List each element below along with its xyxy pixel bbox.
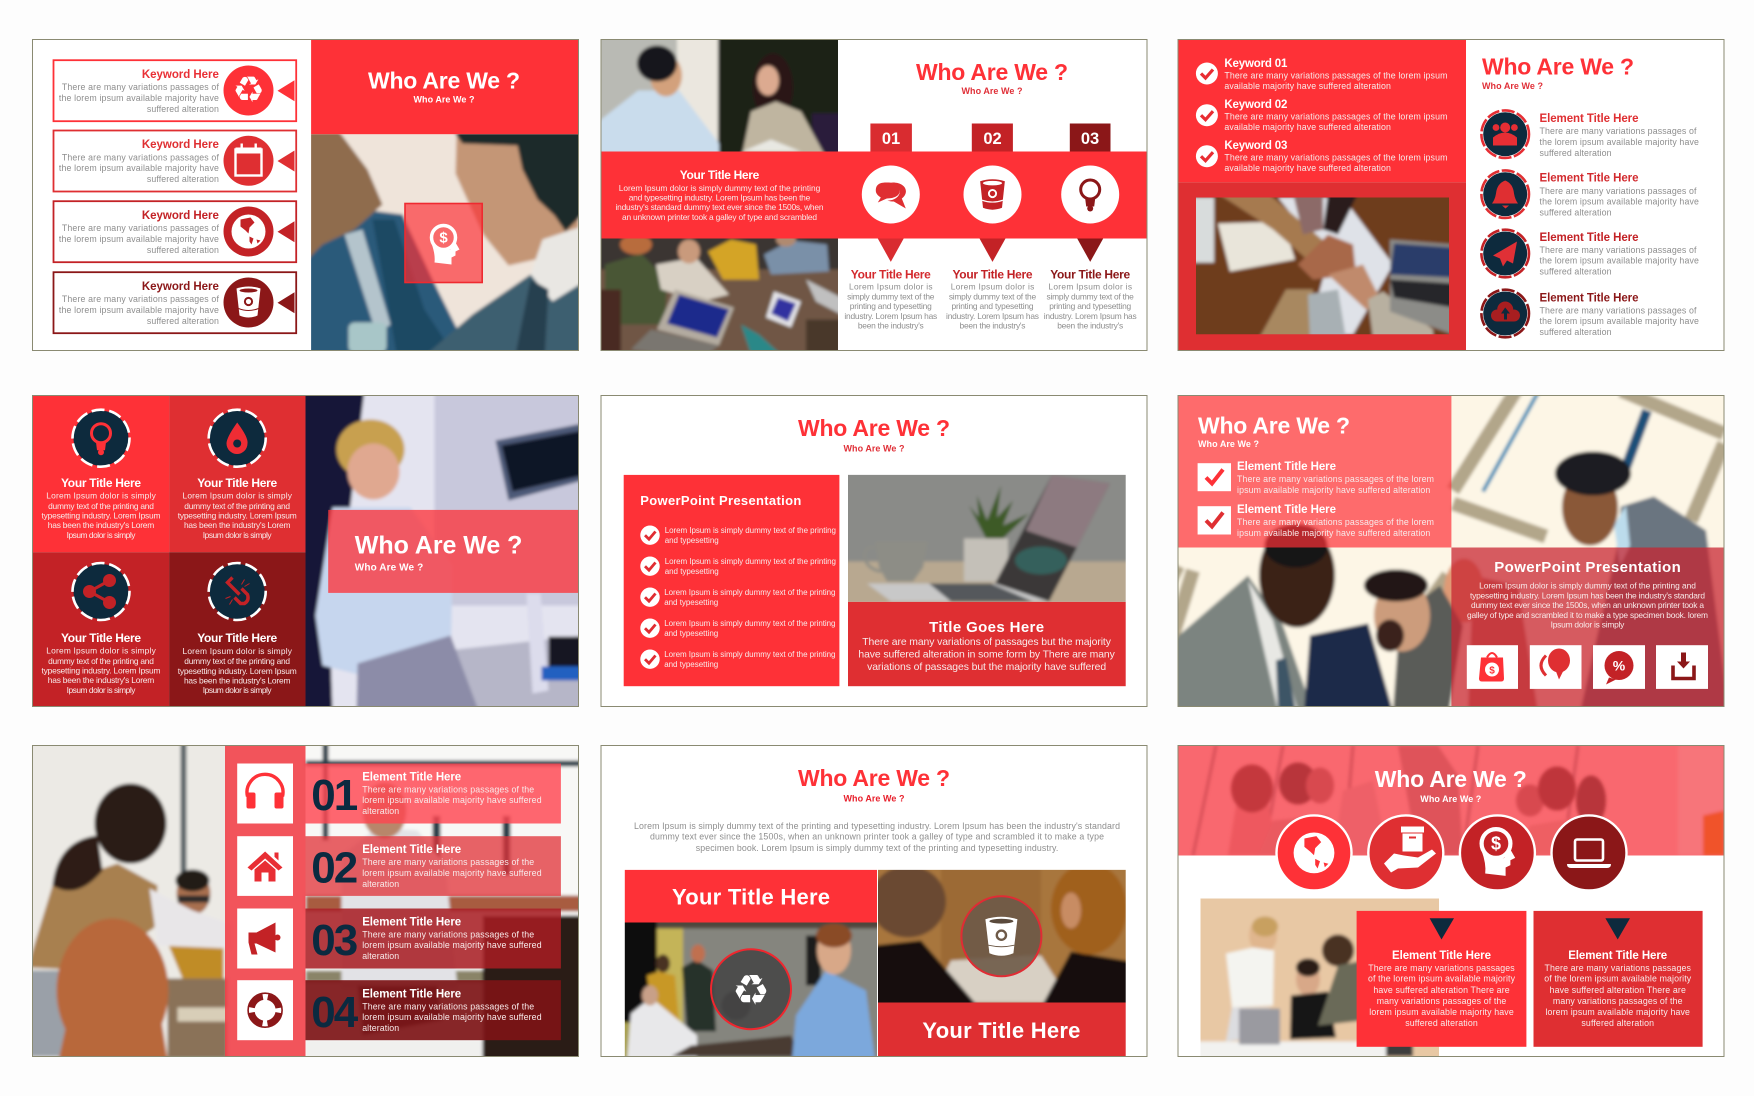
quadrant 4: Ipsum dolor is simply xyxy=(203,685,272,695)
panel: slide 9 four circles and two boxes xyxy=(1178,746,1724,1060)
keyword box 1 xyxy=(54,60,296,121)
element 2: Element Title Here xyxy=(1540,172,1638,184)
photo: team in studio xyxy=(621,918,881,1060)
checklist panel: and typesetting xyxy=(664,598,718,607)
element 03: There are many variations passages of the xyxy=(362,930,534,940)
checklist panel xyxy=(624,475,839,686)
keyword box 1: suffered alteration xyxy=(147,104,219,114)
panel: slide 7 numbered elements xyxy=(28,740,586,1066)
checklist panel: and typesetting xyxy=(664,660,718,669)
translucent panel: powerpoint presentation: PowerPoint Presentation xyxy=(1494,559,1681,576)
element 3 xyxy=(1481,230,1699,277)
step 03: industry. Lorem Ipsum has xyxy=(1044,311,1137,321)
icon: bucket in ring xyxy=(961,896,1041,976)
keyword box 3: the lorem ipsum available majority have xyxy=(59,234,219,244)
quadrant 4: Lorem Ipsum dolor is simply xyxy=(182,646,293,656)
photo: three colleagues at laptop xyxy=(1196,894,1443,1060)
quadrant 1: Your Title Here xyxy=(61,476,141,490)
quadrant 4: Your Title Here xyxy=(197,631,278,645)
keyword box 2: Keyword Here xyxy=(142,139,219,151)
icon: speech bubbles xyxy=(1530,645,1582,689)
step 01: Your Title Here xyxy=(851,268,931,282)
element 2 xyxy=(1481,170,1699,218)
element 4: suffered alteration xyxy=(1540,327,1612,337)
keyword box 3 xyxy=(54,201,296,262)
circle icon: hand holding box xyxy=(1368,815,1443,890)
checklist panel: Lorem Ipsum is simply dummy text of the printing xyxy=(664,650,836,659)
translucent heading band: Who Are We ? xyxy=(355,562,423,574)
quadrant 3 xyxy=(32,552,169,706)
quadrant 3: Your Title Here xyxy=(61,631,141,645)
red keyword panel: Keyword 03 xyxy=(1224,140,1287,152)
translucent panel: who are we: There are many variations passages of the lorem xyxy=(1237,474,1434,484)
icon: recycle in ring: ♻ xyxy=(732,966,770,1014)
element 3: the lorem ipsum available majority have xyxy=(1540,256,1699,266)
info box left: of the lorem ipsum available majority xyxy=(1368,974,1516,984)
panel: slide 1 keywords xyxy=(32,40,588,360)
info box right: lorem ipsum available majority have xyxy=(1545,1007,1690,1017)
photo band tinted red xyxy=(1178,746,1724,856)
quadrant 1: Lorem Ipsum dolor is simply xyxy=(46,490,157,500)
info box right: suffered alteration xyxy=(1581,1018,1654,1028)
element 04: 04 xyxy=(311,988,359,1037)
red keyword panel: Keyword 01 xyxy=(1224,58,1288,70)
step 02: industry. Lorem Ipsum has xyxy=(946,311,1039,321)
quadrant 2: has been the industry's Lorem xyxy=(184,520,290,530)
red keyword panel: There are many variations passages of the lorem ipsum xyxy=(1224,70,1447,80)
red keyword panel: available majority have suffered alteration xyxy=(1224,122,1391,132)
heading: Who Are We ? xyxy=(798,415,950,441)
quadrant 1 xyxy=(32,396,169,552)
element 1: There are many variations passages of xyxy=(1540,126,1697,136)
heading panel xyxy=(311,40,578,134)
quadrant 2 xyxy=(169,396,306,552)
photo: businessman reading xyxy=(311,134,578,350)
quadrant 1: dummy text of the printing and xyxy=(48,501,154,511)
photo: businesswoman xyxy=(302,390,584,710)
checklist panel: and typesetting xyxy=(665,567,719,576)
translucent panel: powerpoint presentation: dummy text ever since the 1500s, when an unknown printer took a xyxy=(1471,600,1704,610)
quadrant 3: Lorem Ipsum dolor is simply xyxy=(46,646,157,656)
icon: download tray xyxy=(1656,645,1708,689)
element 04: alteration xyxy=(362,1023,399,1033)
info box right: There are many variations passages xyxy=(1544,963,1691,973)
icon: head with dollar in translucent square: $ xyxy=(439,230,448,246)
caption panel xyxy=(848,602,1126,686)
circle icon: laptop xyxy=(1552,815,1626,890)
info box left: many variations passages of the xyxy=(1377,996,1506,1006)
checklist panel: and typesetting xyxy=(665,536,719,545)
photo: man and woman talking xyxy=(602,40,838,152)
translucent panel: who are we: Who Are We ? xyxy=(1198,412,1350,438)
panel: slide 2 three-step band xyxy=(596,34,1147,360)
heading: Who Are We ? xyxy=(844,794,904,804)
step 03 xyxy=(1044,124,1137,330)
red band: Your Title Here xyxy=(680,168,760,182)
heading xyxy=(798,415,950,454)
step 02: simply dummy text of the xyxy=(949,292,1036,302)
caption panel: variations of passages but the majority have suffered xyxy=(867,662,1106,673)
element 4: the lorem ipsum available majority have xyxy=(1540,316,1699,326)
quadrant 1: has been the industry's Lorem xyxy=(48,520,154,530)
circle icon: head with dollar xyxy=(1460,815,1535,890)
icon: head with dollar in translucent square xyxy=(405,204,482,282)
panel: slide 3 keywords and elements xyxy=(1178,40,1724,350)
step 02: been the industry's xyxy=(960,320,1025,330)
element 01: Element Title Here xyxy=(362,772,461,784)
icon: shopping bag: $ xyxy=(1489,666,1495,676)
caption panel: There are many variations of passages but the majority xyxy=(862,637,1112,648)
info box left: have suffered alteration There are xyxy=(1373,985,1510,995)
quadrant 4: dummy text of the printing and xyxy=(184,656,290,666)
step 03: printing and typesetting xyxy=(1049,301,1132,311)
step 03: simply dummy text of the xyxy=(1047,292,1134,302)
element 2: the lorem ipsum available majority have xyxy=(1540,196,1699,206)
element 01: alteration xyxy=(362,806,399,816)
translucent panel: powerpoint presentation: Ipsum dolor is simply xyxy=(1551,620,1625,630)
red band: industry's standard dummy text ever since the 1500s, when xyxy=(616,202,824,212)
heading: Who Are We ? xyxy=(1482,54,1634,80)
keyword box 2: suffered alteration xyxy=(147,174,219,184)
element 01: lorem ipsum available majority have suffered xyxy=(362,795,542,805)
intro text: dummy text ever since the 1500s, when an unknown printer took a galley of type and scrambled it to make a type xyxy=(650,832,1104,842)
quadrant 4: has been the industry's Lorem xyxy=(184,676,290,686)
intro text: Lorem Ipsum is simply dummy text of the printing and typesetting industry. Lorem Ipsum has been the industry's standard xyxy=(634,821,1120,831)
quadrant 3: has been the industry's Lorem xyxy=(48,675,154,685)
step 02: 02 xyxy=(983,130,1002,148)
info box left xyxy=(1357,911,1526,1047)
checklist panel: and typesetting xyxy=(664,629,718,638)
circle icon: globe xyxy=(1276,815,1352,890)
photo: two women at a table xyxy=(878,870,1126,1002)
step 01: Lorem Ipsum dolor is xyxy=(849,282,933,292)
element 03: alteration xyxy=(362,951,399,961)
element 04: lorem ipsum available majority have suffered xyxy=(362,1012,542,1022)
caption panel: Title Goes Here xyxy=(929,619,1044,636)
translucent panel: powerpoint presentation xyxy=(1451,548,1724,706)
quadrant 4: typesetting industry. Lorem Ipsum xyxy=(178,666,297,676)
heading xyxy=(798,765,950,804)
step 02 xyxy=(946,124,1039,330)
element 04: Element Title Here xyxy=(362,988,461,1000)
step 01: 01 xyxy=(882,130,900,148)
info box left: suffered alteration xyxy=(1405,1018,1478,1028)
panel: slide 4 four quadrants xyxy=(32,390,584,710)
quadrant 2: Ipsum dolor is simply xyxy=(203,530,272,540)
checklist panel: Lorem Ipsum is simply dummy text of the printing xyxy=(664,619,836,628)
element 2: suffered alteration xyxy=(1540,208,1612,218)
title bar left xyxy=(625,870,877,922)
icon: shopping bag xyxy=(1467,645,1518,689)
step 03: been the industry's xyxy=(1057,320,1123,330)
checklist panel: Lorem Ipsum is simply dummy text of the printing xyxy=(664,588,836,597)
quadrant 1: typesetting industry. Lorem Ipsum xyxy=(42,510,161,520)
icon: percent bubble: % xyxy=(1613,658,1626,674)
heading: Who Are We ? xyxy=(1420,794,1481,804)
keyword box 4: suffered alteration xyxy=(147,316,219,326)
keyword box 4: Keyword Here xyxy=(142,281,219,293)
quadrant 2: Lorem Ipsum dolor is simply xyxy=(182,490,293,500)
heading panel: Who Are We ? xyxy=(414,94,474,104)
quadrant 3: Ipsum dolor is simply xyxy=(67,685,136,695)
translucent panel: who are we: Element Title Here xyxy=(1237,461,1336,473)
photo: stacked hands on desk xyxy=(1192,194,1454,338)
keyword box 4: the lorem ipsum available majority have xyxy=(59,305,219,315)
element 4 xyxy=(1481,290,1699,337)
keyword box 2 xyxy=(54,130,296,192)
heading xyxy=(1482,54,1634,91)
translucent panel: who are we: Who Are We ? xyxy=(1198,439,1259,449)
step 01: industry. Lorem Ipsum has xyxy=(844,311,937,321)
step 03: Your Title Here xyxy=(1050,268,1131,282)
heading xyxy=(1375,766,1527,804)
step 02: Lorem Ipsum dolor is xyxy=(951,282,1034,292)
title bar right xyxy=(878,1002,1126,1056)
info box right: have suffered alteration There are xyxy=(1550,985,1686,995)
panel: slide 6 team photo with overlays xyxy=(1168,390,1729,712)
translucent panel: who are we xyxy=(1178,396,1451,548)
quadrant 4 xyxy=(169,552,306,706)
intro text xyxy=(634,821,1120,853)
step 03: Lorem Ipsum dolor is xyxy=(1048,282,1132,292)
red keyword panel xyxy=(1178,40,1466,350)
circle icon: head with dollar: $ xyxy=(1491,833,1501,853)
element 1: Element Title Here xyxy=(1540,113,1638,125)
info box right: of the lorem ipsum available majority xyxy=(1544,974,1692,984)
element 02: alteration xyxy=(362,879,399,889)
element 01: 01 xyxy=(311,771,358,820)
keyword box 4 xyxy=(54,272,296,333)
keyword box 3: suffered alteration xyxy=(147,245,219,255)
heading: Who Are We ? xyxy=(1482,81,1543,91)
info box left: There are many variations passages xyxy=(1368,963,1515,973)
step 01 xyxy=(844,124,937,330)
translucent panel: who are we: There are many variations passages of the lorem xyxy=(1237,517,1434,527)
keyword box 3: There are many variations passages of xyxy=(62,223,219,233)
quadrant 2: typesetting industry. Lorem Ipsum xyxy=(178,510,297,520)
step 02: printing and typesetting xyxy=(952,301,1034,311)
translucent panel: who are we: Element Title Here xyxy=(1237,504,1336,516)
step 02: Your Title Here xyxy=(952,268,1033,282)
element 03: 03 xyxy=(311,916,358,965)
heading panel: Who Are We ? xyxy=(368,68,520,94)
info box right: many variations passages of the xyxy=(1553,996,1683,1006)
info box right xyxy=(1534,911,1703,1047)
element 04 xyxy=(237,980,561,1040)
quadrant 3: typesetting industry. Lorem Ipsum xyxy=(42,666,161,676)
heading: Who Are We ? xyxy=(844,444,904,454)
translucent red column xyxy=(225,746,306,1056)
intro text: specimen book. Lorem Ipsum is simply dummy text of the printing and typesetting industry. xyxy=(696,843,1058,853)
step 01: simply dummy text of the xyxy=(847,292,935,302)
translucent panel: who are we: ipsum available majority have suffered alteration xyxy=(1237,528,1430,538)
heading: Who Are We ? xyxy=(962,86,1022,96)
red band: and typesetting industry. Lorem Ipsum has been the xyxy=(629,192,811,202)
checklist panel: Lorem Ipsum is simply dummy text of the printing xyxy=(665,526,836,535)
icon: recycle in ring xyxy=(711,949,791,1029)
photo: smiling business team xyxy=(1168,390,1729,712)
panel: slide 8 two titled photos xyxy=(601,746,1147,1060)
element 3: Element Title Here xyxy=(1540,232,1638,244)
quadrant 2: Your Title Here xyxy=(197,476,278,490)
keyword box 1: Keyword Here xyxy=(142,69,219,81)
element 1 xyxy=(1481,110,1699,158)
element 04: There are many variations passages of the xyxy=(362,1002,534,1012)
photo: team around a table xyxy=(602,238,838,350)
translucent heading band xyxy=(328,510,578,593)
element 03 xyxy=(237,908,561,968)
red band xyxy=(601,152,1147,238)
element 02 xyxy=(237,836,561,896)
keyword box 4: There are many variations passages of xyxy=(62,294,219,304)
red keyword panel: available majority have suffered alteration xyxy=(1224,163,1391,173)
quadrant 2: dummy text of the printing and xyxy=(184,501,290,511)
translucent panel: powerpoint presentation: galley of type and scrambled it to make a type specimen book. lorem xyxy=(1467,610,1708,620)
title bar right: Your Title Here xyxy=(922,1018,1080,1043)
step 03: 03 xyxy=(1081,130,1099,148)
quadrant 3: dummy text of the printing and xyxy=(48,656,154,666)
photo: meeting room xyxy=(28,740,586,1066)
translucent panel: who are we: ipsum available majority have suffered alteration xyxy=(1237,485,1430,495)
info box right: Element Title Here xyxy=(1568,950,1667,962)
element 02: Element Title Here xyxy=(362,844,461,856)
element 3: There are many variations passages of xyxy=(1540,245,1697,255)
element 2: There are many variations passages of xyxy=(1540,186,1697,196)
element 01: There are many variations passages of the xyxy=(362,784,534,794)
element 02: 02 xyxy=(311,844,358,892)
info box left: Element Title Here xyxy=(1392,950,1491,962)
red band: Lorem Ipsum dolor is simply dummy text of the printing xyxy=(619,183,821,193)
element 4: Element Title Here xyxy=(1540,292,1638,304)
heading: Who Are We ? xyxy=(1375,766,1527,792)
red keyword panel: available majority have suffered alteration xyxy=(1224,81,1391,91)
checklist panel: Lorem Ipsum is simply dummy text of the printing xyxy=(665,557,836,566)
checklist panel: PowerPoint Presentation xyxy=(640,493,801,508)
red keyword panel: There are many variations passages of the lorem ipsum xyxy=(1224,152,1447,162)
element 01 xyxy=(237,764,561,824)
red keyword panel: There are many variations passages of the lorem ipsum xyxy=(1224,112,1447,122)
keyword box 3: Keyword Here xyxy=(142,210,219,222)
photo: laptop and cup on desk xyxy=(844,470,1130,606)
translucent panel: powerpoint presentation: Lorem Ipsum dolor is simply dummy text of the printing and xyxy=(1479,580,1696,590)
element 03: Element Title Here xyxy=(362,916,461,928)
translucent panel: powerpoint presentation: typesetting industry. Lorem Ipsum has been the industry's standard xyxy=(1470,590,1705,600)
red keyword panel: Keyword 02 xyxy=(1224,99,1287,111)
quadrant 1: Ipsum dolor is simply xyxy=(67,530,136,540)
element 4: There are many variations passages of xyxy=(1540,306,1697,316)
step 01: printing and typesetting xyxy=(850,301,932,311)
info box left: lorem ipsum available majority have xyxy=(1369,1007,1514,1017)
heading: Who Are We ? xyxy=(916,59,1068,85)
panel: slide 5 presentation list xyxy=(601,396,1147,706)
element 03: lorem ipsum available majority have suffered xyxy=(362,940,542,950)
translucent heading band: Who Are We ? xyxy=(355,532,522,560)
caption panel: have suffered alteration in some form by There are many xyxy=(858,650,1116,660)
heading: Who Are We ? xyxy=(798,765,950,791)
icon: percent bubble xyxy=(1593,645,1645,689)
keyword box 2: There are many variations passages of xyxy=(62,152,219,162)
element 1: suffered alteration xyxy=(1540,148,1612,158)
title bar left: Your Title Here xyxy=(672,884,830,910)
keyword box 1: There are many variations passages of xyxy=(62,82,219,92)
keyword box 1: ♻ xyxy=(232,70,265,111)
keyword box 2: the lorem ipsum available majority have xyxy=(59,163,219,173)
keyword box 1: the lorem ipsum available majority have xyxy=(59,93,219,103)
element 02: There are many variations passages of the xyxy=(362,857,534,867)
element 1: the lorem ipsum available majority have xyxy=(1540,137,1699,147)
element 3: suffered alteration xyxy=(1540,266,1612,276)
element 02: lorem ipsum available majority have suffered xyxy=(362,868,542,878)
red band: an unknown printer took a galley of type and scrambled xyxy=(622,212,817,222)
step 01: been the industry's xyxy=(858,320,924,330)
